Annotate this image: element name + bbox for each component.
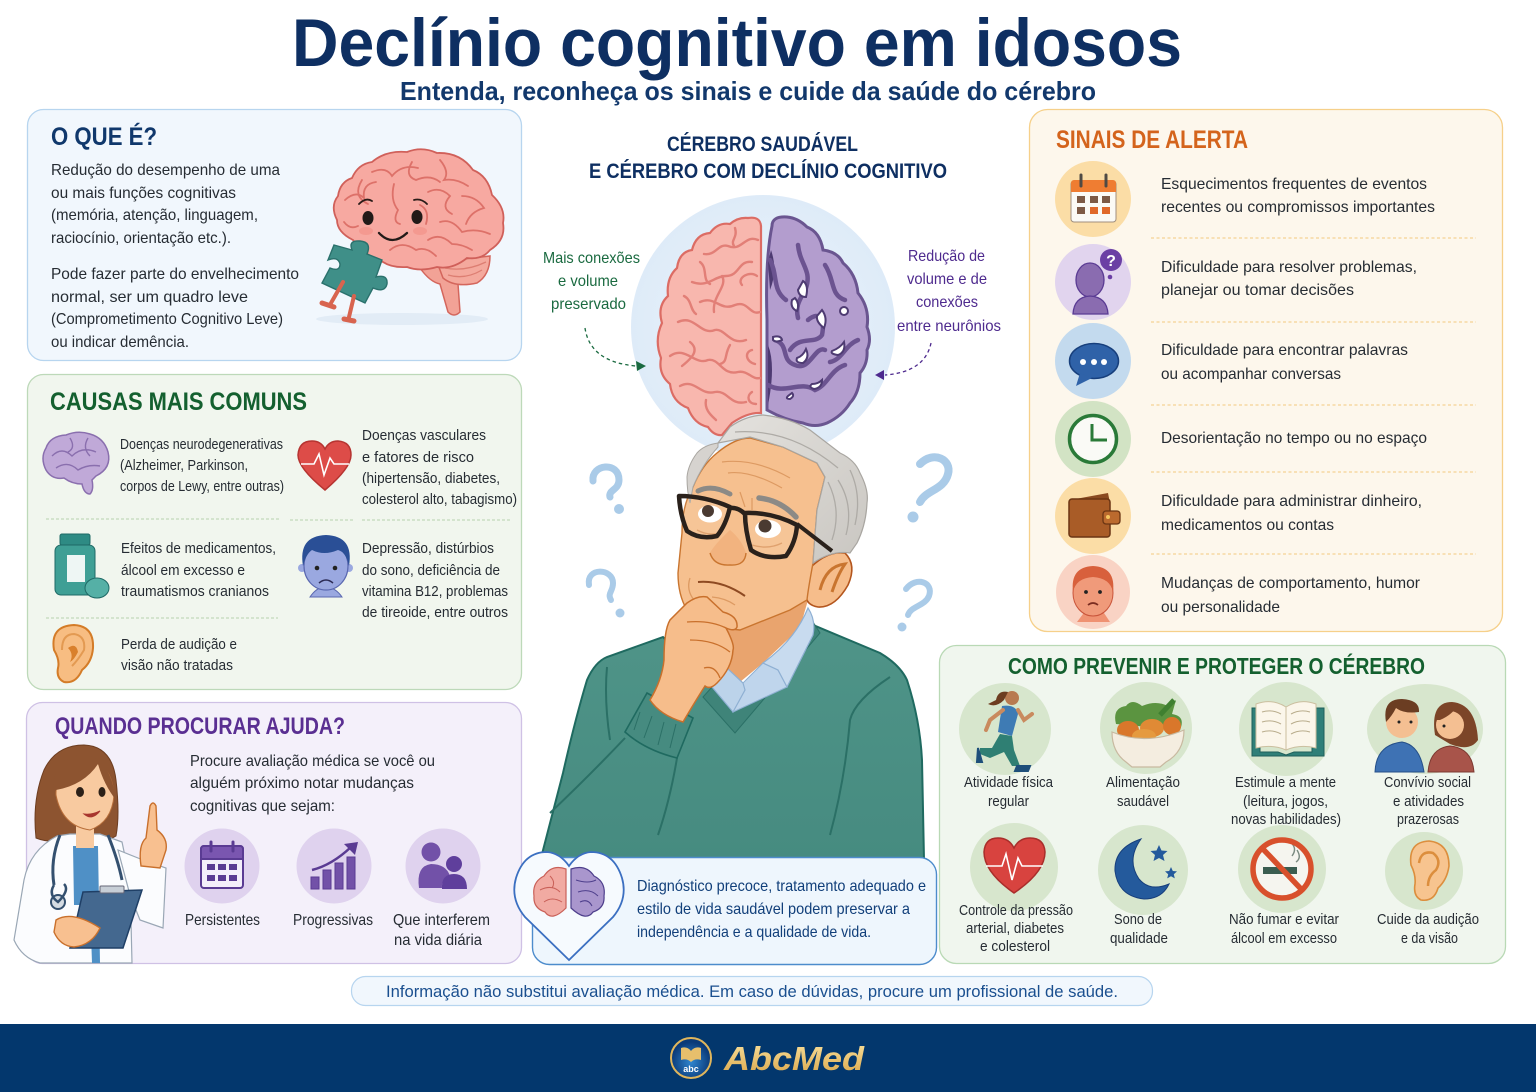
icon: moon bbox=[1098, 825, 1188, 915]
label: não fumar bbox=[1229, 912, 1339, 947]
label: estimule a mente: Estimule a mente bbox=[1235, 775, 1336, 791]
glasses bbox=[679, 496, 832, 557]
label: redução de volume bbox=[897, 248, 1001, 335]
heading: sinais: SINAIS DE ALERTA bbox=[1056, 126, 1248, 154]
text: diagnóstico: estilo de vida saudável podem preservar a bbox=[637, 901, 910, 918]
label: atividade física: regular bbox=[988, 794, 1029, 810]
hand bbox=[650, 597, 737, 722]
text: doenças vasculares bbox=[362, 428, 517, 508]
panel: sinais de alerta bbox=[1030, 110, 1502, 632]
footer bar bbox=[0, 1024, 1536, 1092]
panel: o que é bbox=[28, 110, 522, 360]
label: mais conexões: e volume bbox=[558, 273, 618, 290]
text: depressão: de tireoide, entre outros bbox=[362, 605, 508, 621]
label: alimentação: saudável bbox=[1117, 794, 1169, 810]
icon: purple brain bbox=[43, 432, 109, 494]
text: audição: visão não tratadas bbox=[121, 658, 233, 674]
text: definição: Redução do desempenho de uma bbox=[51, 162, 280, 179]
text: definição: ou mais funções cognitivas bbox=[51, 185, 236, 202]
label: controle da pressão: arterial, diabetes bbox=[966, 921, 1064, 937]
label: estimule a mente: (leitura, jogos, bbox=[1243, 794, 1328, 810]
heading: como prevenir: COMO PREVENIR E PROTEGER O CÉREBRO bbox=[1008, 652, 1425, 679]
icon: heart bbox=[298, 441, 351, 490]
label: redução de volume: conexões bbox=[916, 294, 978, 311]
text: sinal 1: Esquecimentos frequentes de eventos bbox=[1161, 176, 1427, 193]
arrow: green dashed bbox=[585, 328, 646, 371]
head bbox=[678, 438, 825, 630]
label: redução de volume: volume e de bbox=[907, 271, 987, 288]
icon: heart with brains bbox=[514, 852, 624, 960]
text: sinal 5 bbox=[1161, 493, 1422, 534]
icon: person question: ? bbox=[1106, 253, 1116, 270]
text: sinal 4: Desorientação no tempo ou no espaço bbox=[1161, 430, 1427, 447]
text: sinal 3: Dificuldade para encontrar palavras bbox=[1161, 342, 1408, 359]
icon: clock bbox=[1055, 401, 1131, 477]
disclaimer bbox=[352, 976, 1152, 1006]
subtitle: Entenda, reconheça os sinais e cuide da saúde do cérebro bbox=[400, 76, 1096, 106]
logo: abc emblem bbox=[671, 1038, 711, 1078]
icon: speech bubble bbox=[1055, 323, 1131, 399]
text: sinal 3 bbox=[1161, 342, 1408, 383]
disclaimer: Informação não substitui avaliação médica. Em caso de dúvidas, procure um profissional de saúde. bbox=[386, 982, 1118, 1001]
collar bbox=[733, 663, 787, 712]
heading: quando procurar ajuda: QUANDO PROCURAR AJUDA? bbox=[55, 713, 345, 740]
text: depressão: Depressão, distúrbios bbox=[362, 541, 494, 557]
icon: two people talking bbox=[1367, 684, 1483, 774]
arrow: purple dashed bbox=[875, 343, 931, 380]
text: sinal 6 bbox=[1161, 575, 1421, 616]
label: atividade física: Atividade física bbox=[964, 775, 1054, 791]
label: sono: Sono de bbox=[1114, 912, 1162, 928]
label: controle da pressão bbox=[959, 903, 1073, 955]
text: doenças vasculares: Doenças vasculares bbox=[362, 428, 486, 444]
heading: brain comparison: CÉREBRO SAUDÁVEL bbox=[667, 133, 858, 156]
text: procure avaliação: Procure avaliação médica se você ou bbox=[190, 753, 435, 770]
icon: heart control bbox=[970, 823, 1058, 911]
icon: calendar bbox=[1055, 161, 1131, 237]
forehead wrinkles bbox=[722, 461, 790, 510]
text: medicamentos: Efeitos de medicamentos, bbox=[121, 541, 276, 557]
callout: diagnóstico precoce bbox=[514, 852, 936, 964]
text: sinal 5: medicamentos ou contas bbox=[1161, 517, 1334, 534]
label: não fumar: Não fumar e evitar bbox=[1229, 912, 1339, 928]
text: sinal 6: ou personalidade bbox=[1161, 599, 1280, 616]
label: convívio social: e atividades bbox=[1393, 794, 1464, 810]
text: sinal 2: Dificuldade para resolver problemas, bbox=[1161, 259, 1417, 276]
illustration: elderly man thinking bbox=[541, 415, 924, 860]
logo: AbcMed wordmark: AbcMed bbox=[723, 1040, 865, 1077]
icon: ear bbox=[1385, 832, 1463, 910]
text: doenças vasculares: (hipertensão, diabetes, bbox=[362, 471, 500, 487]
label: cuide da audição bbox=[1377, 912, 1479, 947]
label: estimule a mente bbox=[1231, 775, 1341, 828]
label: controle da pressão: Controle da pressão bbox=[959, 903, 1073, 919]
panel: como prevenir bbox=[940, 646, 1506, 964]
text: sinal 2 bbox=[1161, 259, 1417, 299]
icon: ear bbox=[53, 625, 93, 682]
cuff bbox=[625, 693, 693, 758]
panel: quando procurar ajuda bbox=[14, 702, 522, 964]
text: sinal 5: Dificuldade para administrar dinheiro, bbox=[1161, 493, 1422, 510]
nose bbox=[710, 530, 746, 565]
text: definição: normal, ser um quadro leve bbox=[51, 289, 248, 306]
brain: declining right hemisphere bbox=[767, 217, 870, 426]
text: diagnóstico: Diagnóstico precoce, tratamento adequado e bbox=[637, 878, 926, 895]
text: procure avaliação: alguém próximo notar mudanças bbox=[190, 775, 414, 792]
text: procure avaliação: cognitivas que sejam: bbox=[190, 798, 335, 815]
text: definição: (Comprometimento Cognitivo Leve) bbox=[51, 311, 283, 328]
label: atividade física bbox=[964, 775, 1054, 810]
label: persistentes: Persistentes bbox=[185, 912, 260, 929]
icon: question marks bbox=[589, 457, 949, 632]
label: mais conexões: preservado bbox=[551, 296, 626, 313]
label: controle da pressão: e colesterol bbox=[980, 939, 1050, 955]
text: definição: ou indicar demência. bbox=[51, 334, 189, 351]
text: doenças neurodegenerativas: (Alzheimer, Parkinson, bbox=[120, 458, 248, 474]
icon: upset face bbox=[1056, 555, 1130, 629]
hair bbox=[718, 415, 867, 563]
label: não fumar: álcool em excesso bbox=[1231, 931, 1337, 947]
heading: o que é: O QUE É? bbox=[51, 122, 157, 151]
icon: no smoking bbox=[1238, 825, 1326, 913]
sweater bbox=[541, 625, 924, 860]
icon: calendar persistentes bbox=[184, 828, 260, 904]
brain: healthy left hemisphere bbox=[658, 218, 761, 435]
text: doenças vasculares: colesterol alto, tabagismo) bbox=[362, 492, 517, 508]
text: depressão: vitamina B12, problemas bbox=[362, 584, 508, 600]
label: que interferem bbox=[393, 912, 490, 949]
label: convívio social bbox=[1384, 775, 1471, 828]
text: medicamentos bbox=[121, 541, 276, 600]
label: alimentação: Alimentação bbox=[1106, 775, 1180, 791]
text: depressão: do sono, deficiência de bbox=[362, 563, 500, 579]
text: definição: (memória, atenção, linguagem, bbox=[51, 207, 258, 224]
icon: food bowl bbox=[1100, 682, 1192, 774]
text: sinal 1: recentes ou compromissos importantes bbox=[1161, 199, 1435, 216]
title: Declínio cognitivo em idosos bbox=[292, 5, 1182, 81]
panel: causas mais comuns bbox=[28, 374, 522, 690]
label: redução de volume: Redução de bbox=[908, 248, 985, 265]
label: sono bbox=[1110, 912, 1168, 947]
icon: runner bbox=[959, 683, 1051, 775]
neck bbox=[705, 600, 808, 682]
text: doenças vasculares: e fatores de risco bbox=[362, 450, 474, 466]
label: progressivas: Progressivas bbox=[293, 912, 373, 929]
text: medicamentos: traumatismos cranianos bbox=[121, 584, 269, 600]
icon: book bbox=[1239, 682, 1333, 776]
label: mais conexões: Mais conexões bbox=[543, 250, 640, 267]
text: sinal 6: Mudanças de comportamento, humor bbox=[1161, 575, 1421, 592]
text: audição: Perda de audição e bbox=[121, 637, 237, 653]
label: que interferem: na vida diária bbox=[394, 932, 482, 949]
text: depressão bbox=[362, 541, 508, 621]
heading: brain comparison bbox=[589, 133, 947, 183]
icon: sad face bbox=[298, 535, 353, 597]
icon: people bbox=[406, 828, 480, 904]
text: diagnóstico: independência e a qualidade de vida. bbox=[637, 924, 871, 941]
label: alimentação bbox=[1106, 775, 1180, 810]
label: convívio social: prazerosas bbox=[1397, 812, 1459, 828]
heading: brain comparison: E CÉREBRO COM DECLÍNIO COGNITIVO bbox=[589, 160, 947, 183]
label: estimule a mente: novas habilidades) bbox=[1231, 812, 1341, 828]
label: redução de volume: entre neurônios bbox=[897, 318, 1001, 335]
text: doenças neurodegenerativas bbox=[120, 437, 284, 495]
text: procure avaliação bbox=[190, 753, 435, 815]
label: sono: qualidade bbox=[1110, 931, 1168, 947]
text: doenças neurodegenerativas: Doenças neurodegenerativas bbox=[120, 437, 283, 453]
heading: causas: CAUSAS MAIS COMUNS bbox=[50, 388, 307, 416]
icon: wallet bbox=[1055, 478, 1131, 554]
icon: cartoon brain with puzzle piece bbox=[316, 149, 504, 325]
label: que interferem: Que interferem bbox=[393, 912, 490, 929]
text: doenças neurodegenerativas: corpos de Lewy, entre outras) bbox=[120, 479, 284, 495]
text: sinal 1 bbox=[1161, 176, 1435, 216]
text: sinal 3: ou acompanhar conversas bbox=[1161, 366, 1341, 383]
text: sinal 2: planejar ou tomar decisões bbox=[1161, 282, 1354, 299]
text: definição bbox=[51, 162, 299, 351]
label: cuide da audição: Cuide da audição bbox=[1377, 912, 1479, 928]
text: medicamentos: álcool em excesso e bbox=[121, 563, 245, 579]
icon: person question bbox=[1055, 244, 1131, 320]
text: audição bbox=[121, 637, 237, 674]
label: cuide da audição: e da visão bbox=[1401, 931, 1458, 947]
label: mais conexões bbox=[543, 250, 640, 313]
illustration: doctor bbox=[14, 745, 166, 963]
ear bbox=[806, 553, 852, 607]
text: diagnóstico bbox=[637, 878, 926, 941]
eyes bbox=[698, 506, 722, 522]
eyebrows bbox=[698, 488, 730, 494]
text: definição: Pode fazer parte do envelhecimento bbox=[51, 266, 299, 283]
background circle behind brains bbox=[631, 195, 895, 459]
mouth bbox=[698, 582, 745, 596]
icon: chart progressivas bbox=[296, 828, 372, 904]
label: convívio social: Convívio social bbox=[1384, 775, 1471, 791]
text: definição: raciocínio, orientação etc.). bbox=[51, 230, 231, 247]
icon: pill bottle bbox=[55, 534, 109, 598]
logo: abc emblem: abc bbox=[683, 1064, 699, 1074]
